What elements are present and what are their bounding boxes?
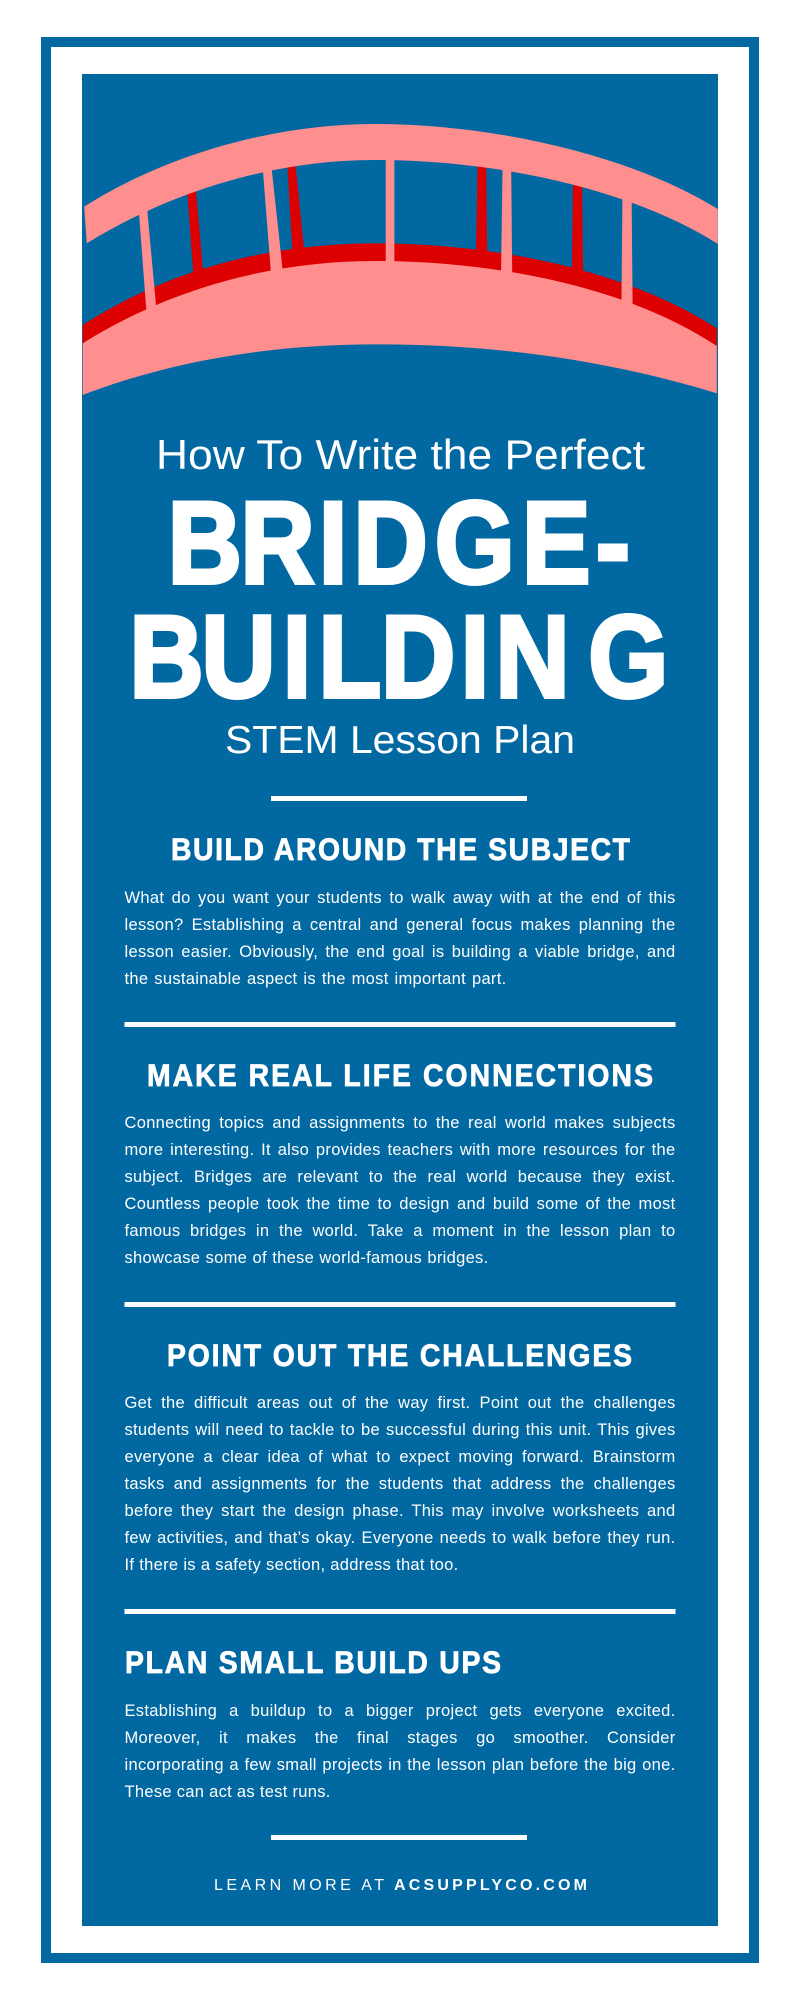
body text: point out the challenges: few activities, and that’s okay. Everyone needs to walk before they run. <box>124 1529 676 1547</box>
body text: plan small build ups <box>124 1702 676 1801</box>
body text: build around the subject: What do you want your students to walk away with at the end of this <box>124 889 676 907</box>
body text: build around the subject <box>124 889 676 988</box>
heading: make real life connections: MAKE REAL LIFE CONNECTIONS <box>147 1059 653 1093</box>
body text: plan small build ups: Moreover, it makes the final stages go smoother. Consider <box>124 1729 676 1747</box>
body text: make real life connections: famous bridges in the world. Take a moment in the lesson plan to <box>124 1222 676 1240</box>
footer call to action: ACSUPPLYCO.COM <box>394 1877 587 1894</box>
body text: point out the challenges: students will need to tackle to be successful during this unit. This gives <box>124 1421 676 1439</box>
divider above footer <box>271 1835 527 1840</box>
body text: build around the subject: lesson? Establishing a central and general focus makes planning the <box>124 916 676 934</box>
body text: point out the challenges <box>124 1394 676 1574</box>
body text: build around the subject: lesson easier. Obviously, the end goal is building a viable bridge, and <box>124 943 676 961</box>
divider 3 <box>124 1609 676 1614</box>
body text: make real life connections <box>124 1114 676 1267</box>
footer call to action: LEARN MORE AT <box>214 1877 384 1894</box>
body text: make real life connections: Countless people took the time to design and build some of the most <box>124 1195 676 1213</box>
body text: make real life connections: subject. Bridges are relevant to the real world because they exist. <box>124 1168 676 1186</box>
body text: make real life connections: more interesting. It also provides teachers with more resources for the <box>124 1141 676 1159</box>
heading: build around the subject: BUILD AROUND THE SUBJECT <box>171 833 630 867</box>
blue content panel <box>82 74 718 1926</box>
bridge illustration <box>83 124 718 395</box>
body text: build around the subject: the sustainable aspect is the most important part. <box>124 970 506 988</box>
heading: plan small build ups: PLAN SMALL BUILD UPS <box>125 1646 501 1680</box>
title: How To Write the Perfect <box>156 431 645 478</box>
title: BUILDING <box>129 592 668 722</box>
footer call to action <box>214 1877 587 1894</box>
body text: point out the challenges: everyone a clear idea of what to expect moving forward. Brainstorm <box>124 1448 676 1466</box>
body text: make real life connections: Connecting topics and assignments to the real world makes subjects <box>124 1114 676 1132</box>
title: STEM Lesson Plan <box>225 719 575 762</box>
divider 1 <box>124 1022 676 1027</box>
body text: point out the challenges: If there is a safety section, address that too. <box>124 1556 458 1574</box>
divider under title <box>271 796 527 801</box>
body text: plan small build ups: incorporating a few small projects in the lesson plan before the big one. <box>124 1756 676 1774</box>
body text: point out the challenges: tasks and assignments for the students that address the challenges <box>124 1475 676 1493</box>
heading: point out the challenges: POINT OUT THE CHALLENGES <box>167 1339 632 1373</box>
title <box>129 431 668 762</box>
body text: point out the challenges: Get the difficult areas out of the way first. Point out the challenges <box>124 1394 676 1412</box>
body text: point out the challenges: before they start the design phase. This may involve worksheets and <box>124 1502 676 1520</box>
body text: make real life connections: showcase some of these world-famous bridges. <box>124 1249 488 1267</box>
body text: plan small build ups: Establishing a buildup to a bigger project gets everyone excited. <box>124 1702 676 1720</box>
title: BRIDGE- <box>168 478 630 608</box>
body text: plan small build ups: These can act as test runs. <box>124 1783 331 1801</box>
divider 2 <box>124 1302 676 1307</box>
